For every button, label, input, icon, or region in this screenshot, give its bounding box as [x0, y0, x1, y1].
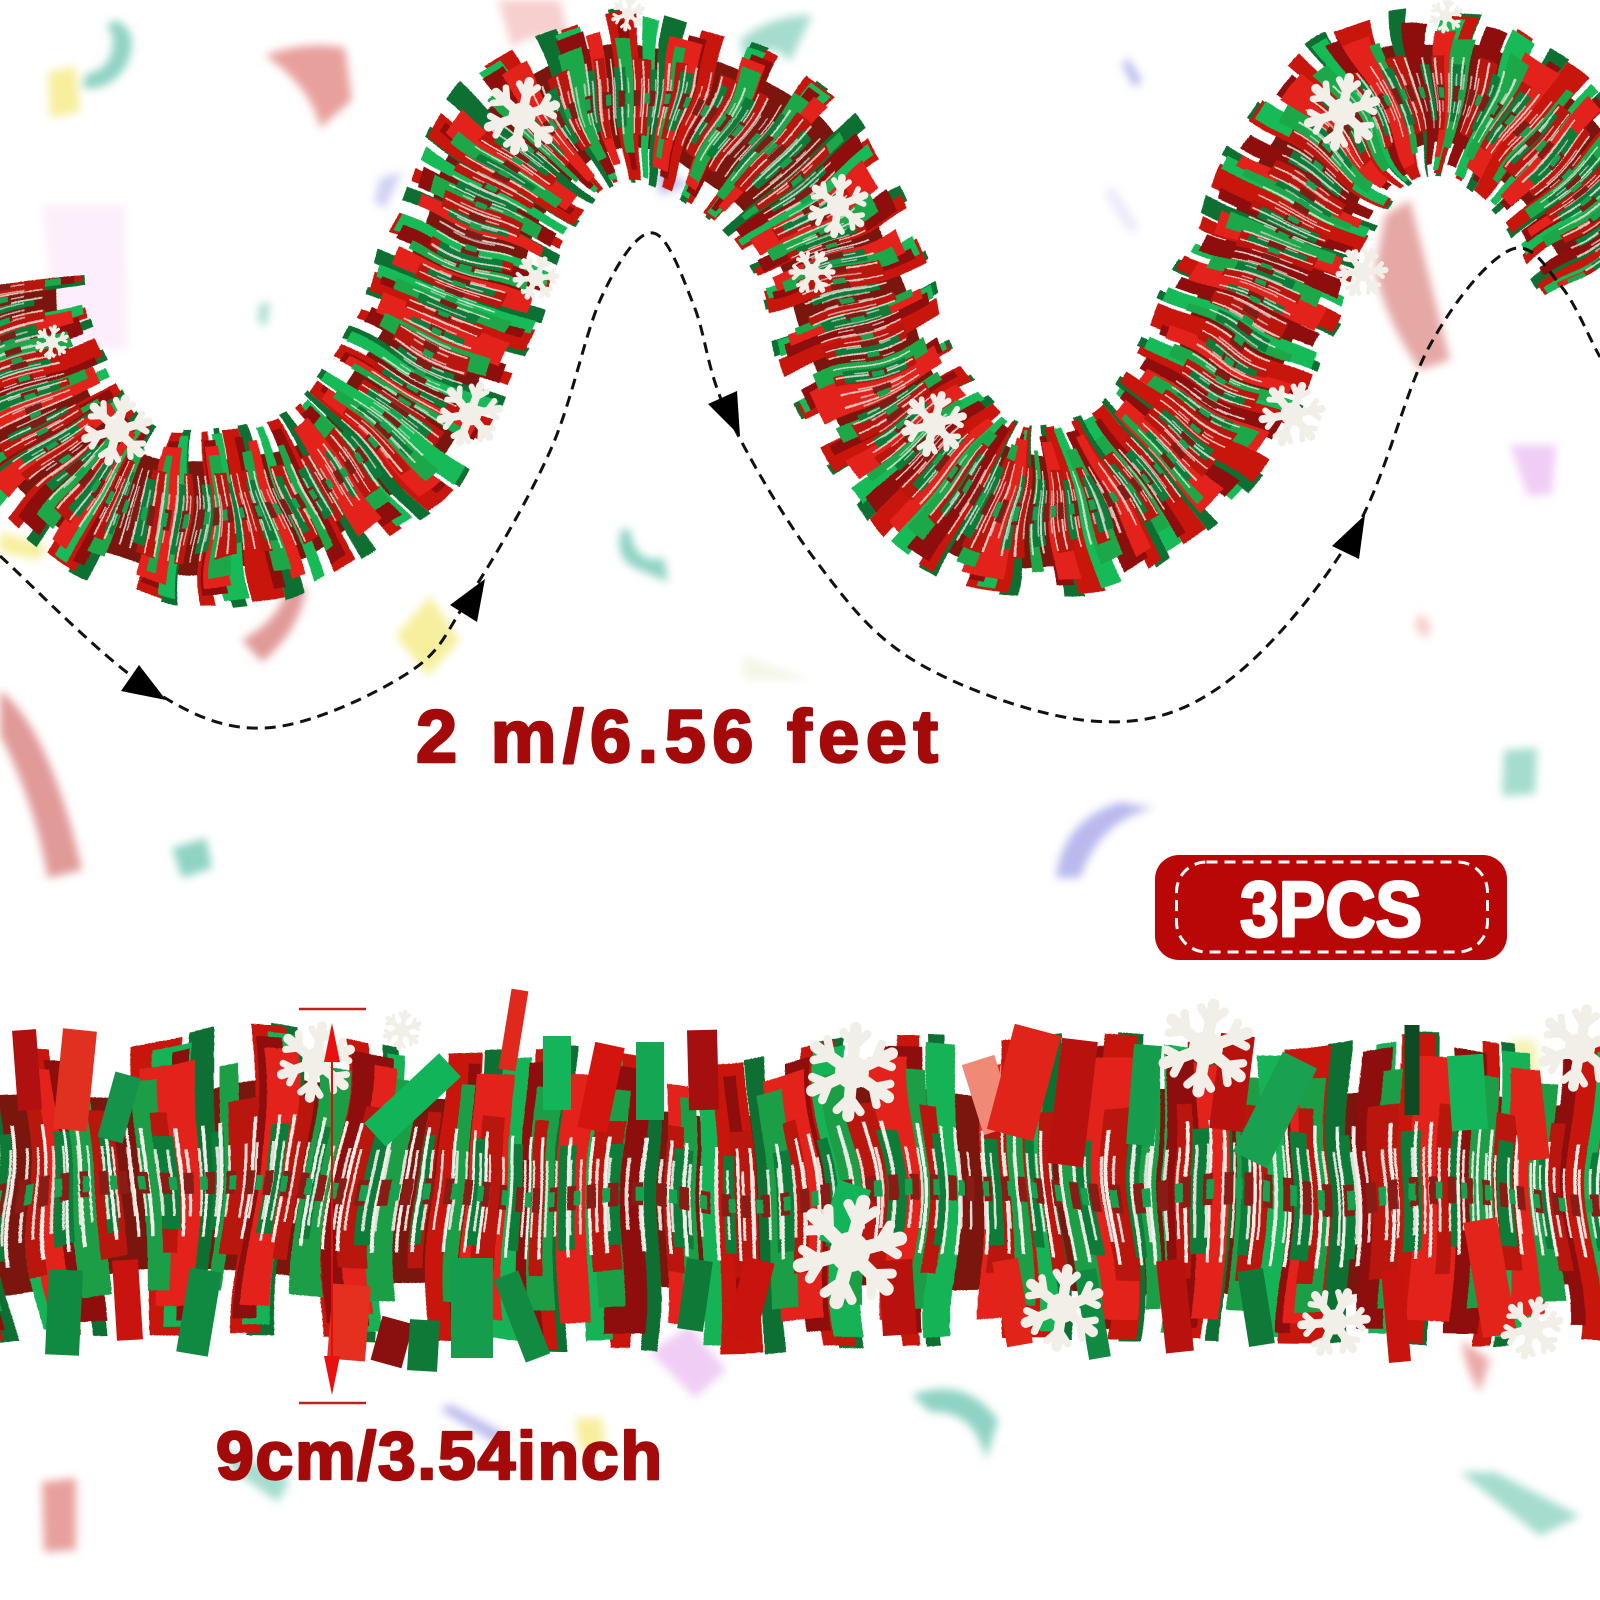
width measure: red double arrow [299, 1009, 366, 1403]
top garland: wavy red, green and white tinsel [0, 93, 1600, 519]
bottom garland: straight tinsel close-up [0, 1187, 1600, 1199]
top garland snowflakes [36, 0, 1462, 469]
length measure: dashed arrow line following the garland [0, 233, 1600, 728]
width label: 9cm/3.54inch [216, 1418, 662, 1494]
bottom garland snowflakes [278, 998, 1600, 1364]
3PCS badge [1155, 855, 1507, 960]
bottom garland long foil strips [24, 990, 1535, 1371]
3PCS badge: 3PCS [1240, 865, 1422, 953]
length label: 2 m/6.56 feet [416, 695, 938, 778]
